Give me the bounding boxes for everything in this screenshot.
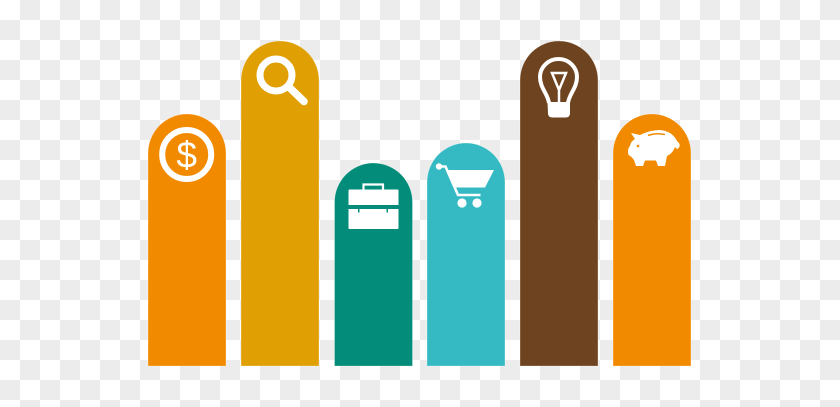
bar 3: teal with briefcase icon — [334, 163, 412, 366]
bar 4: cyan with shopping cart icon — [427, 143, 505, 366]
bar 5: brown with light bulb icon — [520, 41, 598, 366]
bar 6: orange with piggy bank icon — [613, 114, 691, 366]
bar 1: orange with dollar icon — [148, 114, 226, 366]
icon: magnifying glass — [260, 59, 304, 102]
icon: briefcase — [348, 184, 398, 229]
bar 2: gold with magnifier icon — [241, 41, 319, 366]
icon: dollar coin: $ — [176, 134, 197, 176]
icon: dollar coin — [162, 130, 211, 179]
icon: light bulb — [540, 59, 577, 118]
icon: piggy bank — [628, 130, 680, 166]
icon: shopping cart — [436, 163, 494, 208]
